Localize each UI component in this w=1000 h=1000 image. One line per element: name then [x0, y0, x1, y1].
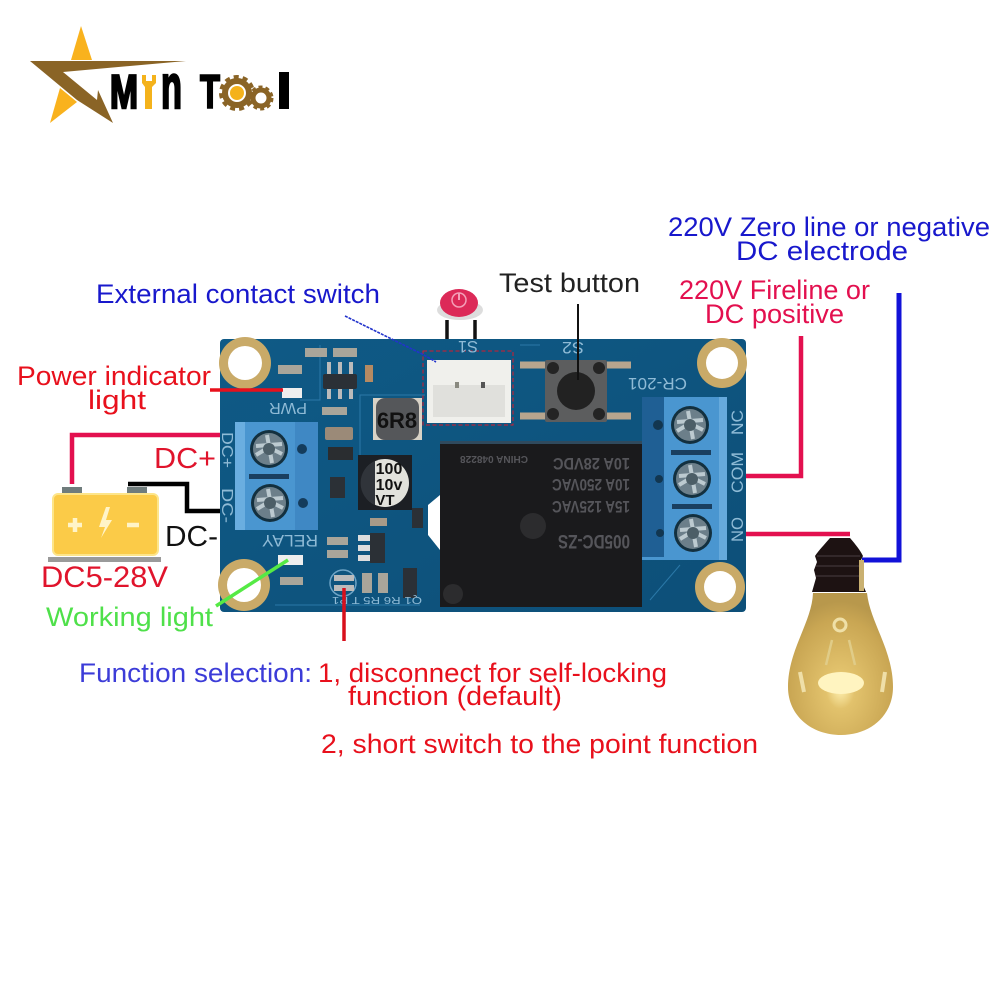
icon: battery [48, 487, 161, 562]
test button [520, 360, 631, 422]
label: option 1: 1, disconnect for self-locking [318, 658, 667, 688]
silkscreen labels: RELAY [262, 531, 318, 550]
wire: zero line [862, 293, 899, 560]
relay: CHINA 048228 [460, 453, 528, 464]
wire: DC minus [128, 484, 222, 511]
label: Zero line: 220V Zero line or negative [668, 212, 990, 242]
small components [278, 348, 423, 598]
silkscreen labels: COM [728, 452, 747, 493]
relay: 005DC-ZS [558, 530, 630, 551]
label: DC+: DC+ [154, 443, 216, 475]
leader: test button [577, 304, 579, 380]
icon: light bulb [788, 538, 893, 735]
logo: Min Tool [30, 26, 289, 123]
label: Working light: Working light [46, 602, 214, 632]
silkscreen labels [218, 337, 747, 605]
electrolytic capacitor [358, 455, 412, 510]
label: Test button: Test button [499, 268, 640, 298]
PCB [220, 339, 746, 612]
electrolytic capacitor: 10v [376, 477, 402, 494]
power LED [282, 388, 302, 398]
electrolytic capacitor: 100 [376, 461, 402, 478]
left terminal block [235, 422, 318, 530]
label: DC positive: DC positive [705, 299, 844, 329]
leader: power indicator [210, 388, 283, 392]
silkscreen labels: NC [728, 410, 747, 435]
silkscreen labels: CR-201 [628, 374, 687, 393]
icon: power switch [437, 289, 483, 339]
wire: fireline [745, 336, 801, 476]
silkscreen labels: DC- [218, 488, 235, 523]
label: light: light [88, 385, 147, 415]
mounting holes [218, 337, 747, 612]
jumper pad [330, 570, 356, 596]
silkscreen labels: NO [728, 517, 747, 542]
label: option 1 second line: function (default) [348, 681, 562, 711]
logo text: n [161, 53, 182, 122]
label: DC-: DC- [165, 521, 218, 553]
relay [440, 441, 642, 607]
silkscreen labels: Q1 R6 R5 T P1 [331, 594, 422, 605]
wire: NO to bulb [745, 532, 850, 536]
relay: 15A 125VAC [552, 497, 630, 516]
label: DC electrode: DC electrode [736, 236, 908, 266]
silkscreen labels: S1 [458, 337, 478, 356]
logo star [30, 26, 186, 123]
inductor 6R8: 6R8 [377, 408, 417, 433]
label: Power indicator: Power indicator [17, 361, 211, 391]
JST connector [423, 351, 513, 425]
relay LED [278, 555, 303, 565]
label: Function selection: Function selection: [79, 658, 312, 688]
leader: function selection [342, 588, 346, 641]
label: Fireline: 220V Fireline or [679, 275, 870, 305]
silkscreen labels: PWR [269, 399, 307, 416]
label: option 2: 2, short switch to the point function [321, 729, 758, 759]
leader: external contact switch [345, 316, 436, 362]
white cutout [428, 495, 440, 550]
silkscreen labels: DC+ [218, 432, 235, 468]
label: External contact switch: External contact switch [96, 279, 380, 309]
electrolytic capacitor: VT [375, 492, 395, 509]
relay module board [218, 337, 747, 612]
wire: DC plus [72, 435, 222, 484]
relay: 10A 28VDC [553, 454, 630, 473]
logo text: T [200, 65, 220, 118]
logo text: M [110, 65, 138, 118]
leader: working light [216, 560, 288, 606]
relay: 10A 250VAC [552, 475, 630, 494]
inductor 6R8 [373, 398, 422, 440]
label: DC5-28V: DC5-28V [41, 561, 168, 594]
silkscreen labels: S2 [562, 338, 584, 357]
logo text [110, 53, 289, 122]
right terminal block [642, 397, 727, 560]
